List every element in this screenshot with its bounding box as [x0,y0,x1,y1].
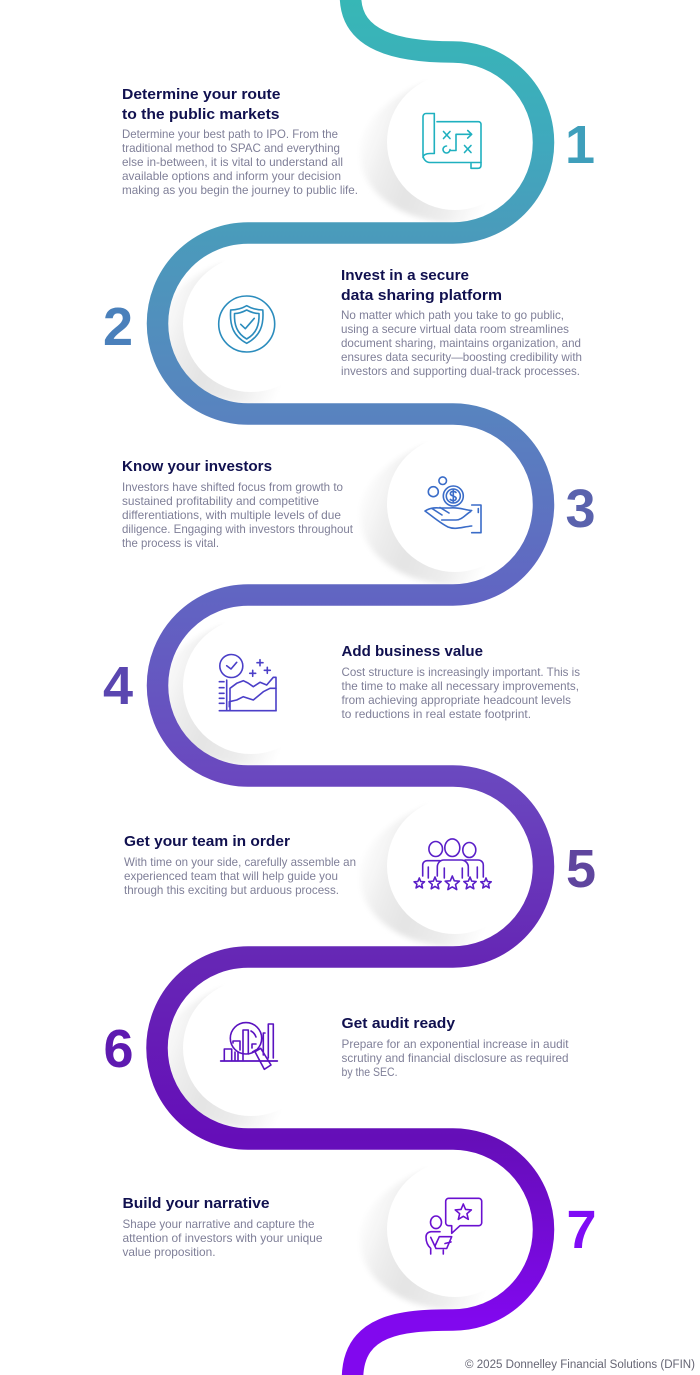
step 5 text block [124,833,356,897]
step 7 body: attention of investors with your unique [122,1231,323,1245]
step 1 heading: to the public markets [122,106,280,123]
step 5 heading: Get your team in order [124,833,290,850]
step 3 text block [122,458,354,550]
step 1 heading [122,86,280,123]
step 1 text block [122,86,358,197]
icon: growth chart [219,654,276,711]
step 1 number: 1 [565,115,595,175]
step 5 body: With time on your side, carefully assemble an [124,855,356,869]
icon: audit magnifier and bars [221,1023,277,1069]
serpentine gradient road [157,0,544,1375]
step 5 number: 5 [566,839,596,899]
step 1 body: making as you begin the journey to public life. [122,183,358,197]
step 6 heading: Get audit ready [342,1015,456,1032]
step 3 body [122,480,354,550]
step 1 body: traditional method to SPAC and everything [122,141,340,155]
icon: treasure map [423,114,481,168]
step 7 body [122,1217,323,1259]
step 7 number: 7 [566,1200,597,1260]
step 5 body: through this exciting but arduous process. [124,883,339,897]
step 2 number: 2 [103,297,133,357]
step 2 heading: data sharing platform [341,287,502,304]
step 7 body: value proposition. [122,1245,216,1259]
step 2 heading [341,267,502,304]
step 2 body [341,308,582,378]
step 4 body: from achieving appropriate headcount levels [342,693,571,707]
step 6 body: by the SEC. [342,1065,398,1079]
step 6 body: Prepare for an exponential increase in audit [342,1037,569,1051]
step 3 body: the process is vital. [122,536,219,550]
step 4 text block [342,643,580,721]
step 3 heading: Know your investors [122,458,272,475]
step 4 body: to reductions in real estate footprint. [342,707,531,721]
white icon circles [183,74,523,1297]
step 7 heading: Build your narrative [122,1195,270,1212]
step 4 body: the time to make all necessary improvements, [342,679,579,693]
step 6 body: scrutiny and financial disclosure as required [342,1051,568,1065]
step 2 body: document sharing, maintains organization, and [341,336,581,350]
step 4 body [342,665,580,721]
circle shadows [156,83,510,1311]
icon: hand holding coins [425,477,481,533]
step 1 body [122,127,358,197]
step 2 body: using a secure virtual data room streamlines [341,322,569,336]
step 4 number: 4 [103,656,133,716]
step 6 text block [342,1015,569,1079]
step 5 body: experienced team that will help guide you [124,869,338,883]
step 3 body: differentiations, with multiple levels of due [122,508,341,522]
step 3 body: diligence. Engaging with investors throughout [122,522,354,536]
step 1 body: available options and inform your decision [122,169,341,183]
step 6 number: 6 [103,1019,134,1079]
copyright footer: © 2025 Donnelley Financial Solutions (DFIN) [465,1359,695,1371]
step 1 body: else in-between, it is vital to understand all [122,155,343,169]
step 5 body [124,855,356,897]
step 3 body: Investors have shifted focus from growth to [122,480,343,494]
step 1 heading: Determine your route [122,86,280,103]
step 7 body: Shape your narrative and capture the [122,1217,315,1231]
step 3 number: 3 [565,479,596,539]
step 2 body: investors and supporting dual-track processes. [341,364,580,378]
step 1 body: Determine your best path to IPO. From the [122,127,338,141]
step 3 body: sustained profitability and competitive [122,494,319,508]
step 6 body [342,1037,569,1079]
icon: security shield [219,296,275,352]
icon: person with star speech bubble [426,1198,482,1254]
step 2 body: No matter which path you take to go public, [341,308,564,322]
step 2 body: ensures data security—boosting credibility with [341,350,582,364]
icon: team with stars [414,839,491,890]
step 2 text block [341,267,582,378]
step 7 text block [122,1195,323,1259]
step 4 heading: Add business value [342,643,483,660]
step 4 body: Cost structure is increasingly important. This is [342,665,580,679]
step 2 heading: Invest in a secure [341,267,469,284]
